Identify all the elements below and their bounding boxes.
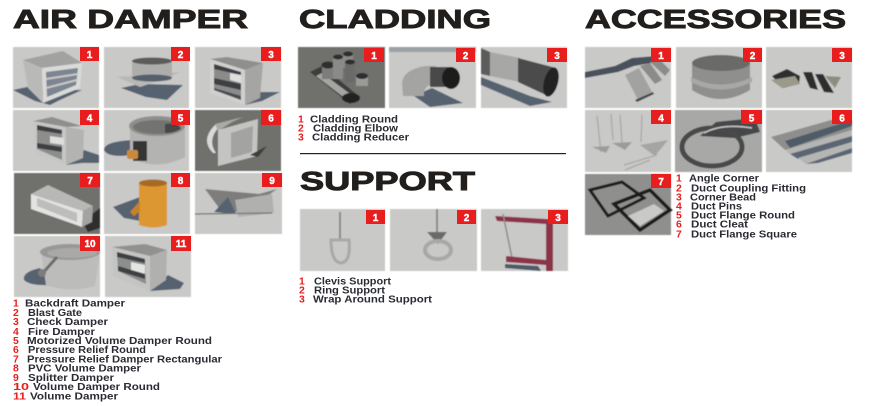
heading: cladding: CLADDING <box>299 6 491 34</box>
tile: air damper 7 <box>14 173 100 234</box>
list: air damper legend: Fire Damper <box>28 327 95 338</box>
list: air damper legend: 2 <box>13 308 19 319</box>
tile: accessories 6 <box>766 110 852 172</box>
panel: cladding <box>298 6 567 154</box>
tile: air damper 3: 3 <box>268 50 274 61</box>
list: accessories legend: 4 <box>676 202 682 212</box>
list: cladding legend: Cladding Reducer <box>312 132 409 144</box>
list: air damper legend: Pressure Relief Round <box>28 345 146 356</box>
list: air damper legend: 1 <box>13 298 19 310</box>
tile: accessories 5: 5 <box>749 114 755 124</box>
list: air damper legend: Splitter Damper <box>28 373 114 384</box>
tile: air damper 8 <box>104 173 190 234</box>
list: air damper legend: Pressure Relief Damper Rectangular <box>27 354 222 366</box>
tile: air damper 6: 6 <box>268 114 274 124</box>
list: accessories legend: Duct Pins <box>691 202 742 212</box>
list: accessories legend: Duct Flange Square <box>691 230 797 240</box>
tile: air damper 9: 9 <box>269 176 275 187</box>
panel: air damper <box>13 6 282 402</box>
list: air damper legend: 5 <box>13 336 19 347</box>
tile: air damper 7: 7 <box>87 176 93 187</box>
list: accessories legend: 3 <box>676 192 682 204</box>
tile: air damper 2: 2 <box>178 50 184 61</box>
tile: air damper 11 <box>105 236 191 297</box>
tile: accessories 1 <box>585 47 671 108</box>
panel: support <box>299 168 568 306</box>
tile: cladding 1 <box>298 47 385 108</box>
list: air damper legend <box>13 298 222 402</box>
list: accessories legend: 5 <box>676 210 682 222</box>
tile: air damper 10: 10 <box>84 239 96 250</box>
tile: cladding 3 <box>481 47 567 108</box>
list: accessories legend: 6 <box>676 220 682 230</box>
panel: accessories <box>585 6 852 240</box>
heading: air damper: AIR DAMPER <box>13 6 248 34</box>
tile: air damper 1: 1 <box>87 50 93 61</box>
tile: cladding 2 <box>389 47 476 108</box>
list: air damper legend: 10 <box>13 382 29 393</box>
list: accessories legend: Corner Bead <box>690 192 756 204</box>
list: accessories legend: Angle Corner <box>689 174 759 184</box>
list: accessories legend <box>676 174 806 240</box>
list: accessories legend: 1 <box>676 174 682 184</box>
tile: accessories 3: 3 <box>839 51 845 62</box>
tile: accessories 6: 6 <box>839 114 845 124</box>
tile: air damper 10 <box>14 236 100 297</box>
list: support legend: Wrap Around Support <box>313 294 433 306</box>
tile: support 3: 3 <box>555 213 561 224</box>
tile: air damper 2 <box>104 47 190 108</box>
list: air damper legend: PVC Volume Damper <box>28 364 141 374</box>
tile: accessories 7: 7 <box>658 177 664 188</box>
list: cladding legend: 1 <box>298 114 304 126</box>
list: air damper legend: Motorized Volume Damper Round <box>27 336 212 347</box>
tile: air damper 6 <box>195 110 281 171</box>
tile: air damper 4 <box>13 110 99 171</box>
tile: cladding 2: 2 <box>463 51 469 62</box>
list: support legend: 3 <box>299 294 305 306</box>
tile: cladding 3: 3 <box>554 51 560 62</box>
tile: accessories 5 <box>675 110 762 172</box>
heading: accessories: ACCESSORIES <box>585 6 846 34</box>
tile: accessories 2: 2 <box>750 51 756 62</box>
tile: support 1: 1 <box>373 213 379 224</box>
heading: support: SUPPORT <box>300 168 476 196</box>
list: air damper legend: 4 <box>13 327 19 338</box>
list: air damper legend: Backdraft Damper <box>25 298 125 310</box>
list: cladding legend <box>298 114 409 144</box>
tile: accessories 3 <box>766 47 852 108</box>
list: support legend: 1 <box>299 276 305 288</box>
list: accessories legend: Duct Coupling Fitting <box>691 184 806 194</box>
tile: air damper 3 <box>195 47 281 108</box>
tile: accessories 2 <box>676 47 762 108</box>
list: accessories legend: Duct Cleat <box>691 220 749 230</box>
tile: cladding 1: 1 <box>371 51 377 62</box>
tile: support 2 <box>390 209 477 271</box>
tile: air damper 4: 4 <box>87 114 93 124</box>
list: air damper legend: 3 <box>13 317 19 328</box>
list: support legend <box>299 276 433 306</box>
list: air damper legend: Volume Damper Round <box>33 382 160 393</box>
tile: support 1 <box>300 209 385 271</box>
tile: air damper 5 <box>104 110 190 171</box>
tile: accessories 7 <box>585 174 671 235</box>
list: air damper legend: Check Damper <box>27 317 108 328</box>
list: accessories legend: Duct Flange Round <box>691 210 795 222</box>
list: air damper legend: 6 <box>13 345 19 356</box>
list: air damper legend: 11 <box>13 392 26 402</box>
tile: support 2: 2 <box>464 213 470 224</box>
tile: accessories 4: 4 <box>658 114 664 124</box>
tile: accessories 1: 1 <box>658 51 664 62</box>
list: cladding legend: Cladding Elbow <box>313 124 399 134</box>
tile: accessories 4 <box>585 110 671 172</box>
tile: air damper 8: 8 <box>178 176 184 187</box>
list: cladding legend: 2 <box>298 124 304 134</box>
list: air damper legend: 9 <box>13 373 19 384</box>
tile: air damper 1 <box>13 47 99 108</box>
list: air damper legend: 7 <box>13 354 19 366</box>
list: support legend: Ring Support <box>314 286 386 296</box>
list: cladding legend: Cladding Round <box>310 114 398 126</box>
list: accessories legend: 2 <box>676 184 682 194</box>
tile: air damper 5: 5 <box>178 114 184 124</box>
list: cladding legend: 3 <box>298 132 304 144</box>
tile: air damper 9 <box>195 173 282 234</box>
list: support legend: Clevis Support <box>314 276 392 288</box>
list: support legend: 2 <box>299 286 305 296</box>
list: air damper legend: Volume Damper <box>30 392 118 402</box>
list: air damper legend: 8 <box>13 364 19 374</box>
tile: support 3 <box>481 209 568 271</box>
list: air damper legend: Blast Gate <box>28 308 82 319</box>
list: accessories legend: 7 <box>676 230 682 240</box>
tile: air damper 11: 11 <box>176 239 187 250</box>
